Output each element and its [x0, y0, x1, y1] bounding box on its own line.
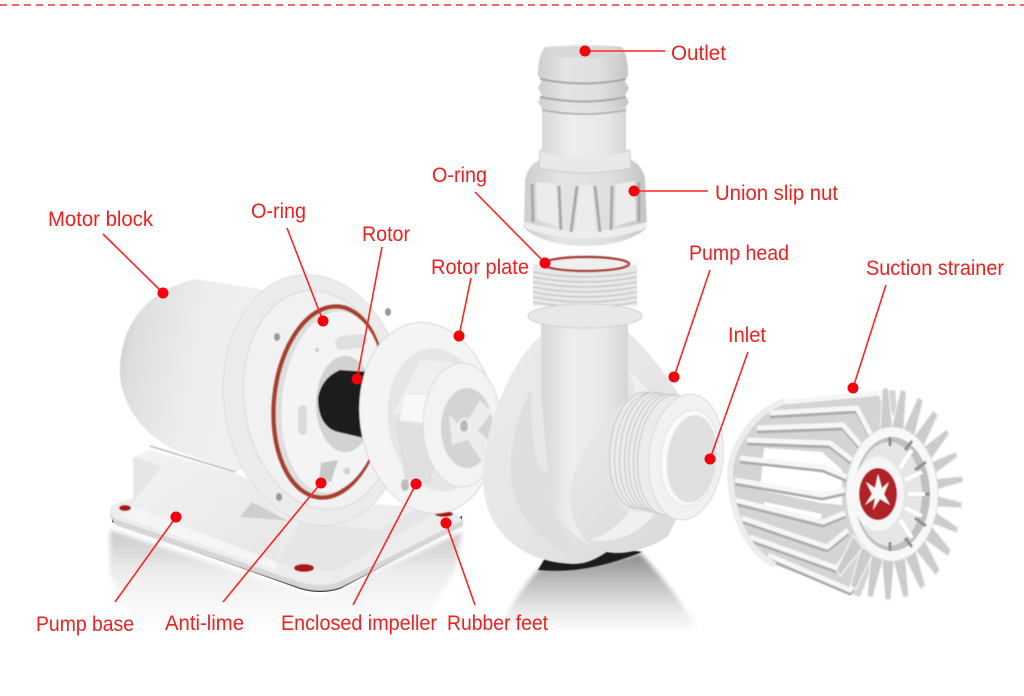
outlet	[538, 45, 629, 158]
label: Pump head: Pump head	[689, 242, 789, 265]
label: Anti-lime: Anti-lime	[165, 612, 244, 635]
label: Pump base: Pump base	[36, 613, 134, 636]
rubber feet	[119, 505, 453, 572]
cage bars	[735, 393, 895, 590]
upper o-ring	[543, 257, 629, 271]
pedestal front face	[133, 450, 285, 562]
top dashed divider	[0, 4, 1024, 6]
label: Inlet: Inlet	[728, 324, 766, 347]
volute right ring	[590, 370, 671, 541]
motor block	[120, 263, 423, 537]
o-ring	[264, 301, 394, 503]
volute left lobe	[511, 390, 585, 556]
label: Rotor plate: Rotor plate	[431, 256, 529, 279]
floor reflections	[110, 516, 700, 632]
red hub	[859, 468, 897, 520]
cage bar shadows	[735, 412, 872, 594]
radial fins	[834, 388, 963, 600]
label: Outlet: Outlet	[671, 42, 726, 65]
front ring	[846, 427, 938, 561]
impeller shroud	[423, 363, 501, 487]
cage body	[730, 390, 905, 597]
label: Motor block: Motor block	[48, 208, 153, 231]
label: Rubber feet: Rubber feet	[447, 612, 548, 635]
threaded outlet of head	[528, 264, 642, 328]
motor flange	[207, 263, 423, 537]
label: Suction strainer: Suction strainer	[866, 257, 1004, 280]
pump base	[110, 450, 463, 591]
stator disc	[273, 306, 393, 498]
label: Union slip nut: Union slip nut	[715, 182, 838, 205]
rotor	[316, 356, 374, 452]
label: O-ring (motor): O-ring	[251, 200, 306, 223]
inlet	[604, 389, 729, 524]
label: Enclosed impeller: Enclosed impeller	[281, 612, 437, 635]
label: Rotor: Rotor	[362, 223, 410, 246]
union slip nut	[524, 150, 647, 246]
callout lines and dots	[103, 46, 886, 605]
pump head	[483, 257, 692, 564]
rotor plate	[347, 313, 509, 523]
label: O-ring (head): O-ring	[432, 164, 487, 187]
suction strainer	[730, 388, 963, 600]
enclosed impeller vanes	[393, 360, 455, 415]
